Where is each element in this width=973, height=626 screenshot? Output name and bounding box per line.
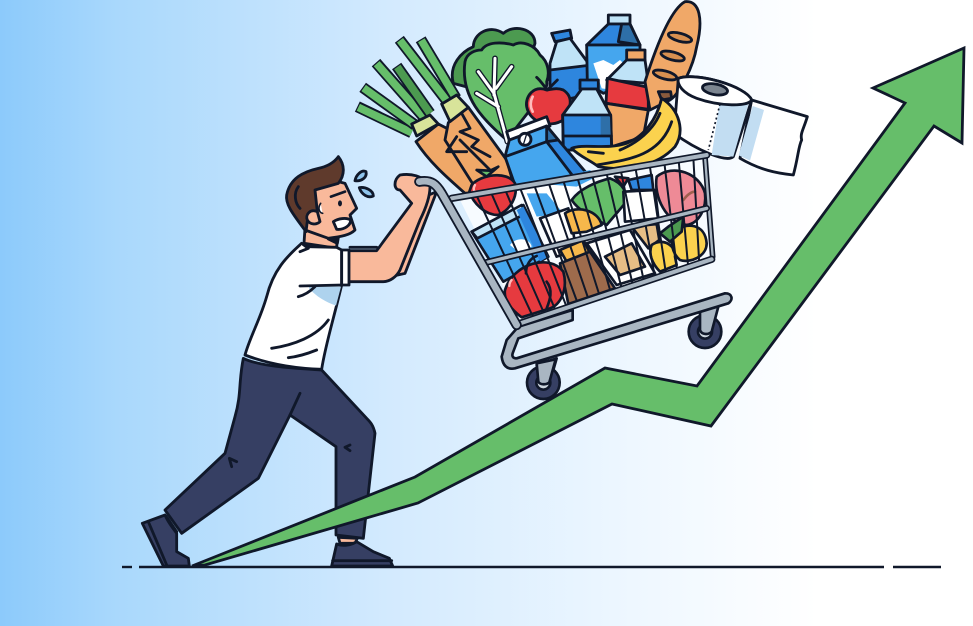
right carrot bbox=[445, 107, 513, 190]
man: torso, head and arms bbox=[245, 157, 437, 369]
rear forearm bbox=[387, 192, 437, 276]
top rail bbox=[452, 155, 707, 198]
back milk carton bbox=[608, 15, 630, 24]
front arm and hand bbox=[348, 174, 430, 282]
bananas bbox=[572, 92, 680, 168]
face bbox=[305, 182, 357, 238]
chin shadow bbox=[328, 238, 338, 243]
ear bbox=[307, 211, 320, 224]
basket frame bbox=[419, 155, 713, 325]
right side bbox=[705, 157, 713, 257]
hair detail bbox=[295, 187, 300, 208]
small apple bbox=[469, 175, 516, 215]
white carton middle bbox=[518, 181, 578, 218]
big red apple bbox=[505, 262, 565, 317]
sleeve cuff bbox=[342, 250, 349, 285]
eye and brow bbox=[319, 192, 345, 213]
ground line bbox=[122, 566, 941, 568]
groceries above the cart bbox=[357, 2, 807, 193]
right shoe bbox=[332, 542, 393, 566]
red-label bottle bbox=[627, 50, 645, 60]
tan block right bbox=[632, 224, 659, 248]
rising green arrow bbox=[192, 48, 964, 566]
baguette bbox=[645, 2, 700, 110]
neck bbox=[304, 228, 337, 248]
front milk carton bbox=[505, 117, 587, 190]
pink ham bbox=[656, 171, 705, 225]
white package right bbox=[623, 190, 658, 222]
trouser creases bbox=[229, 393, 350, 467]
gritted teeth bbox=[333, 218, 351, 229]
toilet paper roll bbox=[674, 77, 807, 175]
red apple bbox=[526, 77, 570, 124]
front water bottle bbox=[563, 80, 612, 150]
pale interior bbox=[460, 160, 710, 320]
lettuce bbox=[452, 28, 548, 142]
bottom rail bbox=[518, 259, 712, 324]
shirt collar bbox=[300, 243, 308, 252]
cart with contents bbox=[419, 155, 732, 399]
carrot greens bbox=[357, 39, 456, 133]
back water bottle bbox=[552, 30, 572, 42]
handle and left side bbox=[419, 181, 517, 325]
right sock bbox=[338, 537, 357, 543]
wheels bbox=[527, 307, 721, 399]
green vegetable bbox=[572, 178, 626, 225]
basket wires bbox=[476, 158, 699, 320]
cart chassis bbox=[502, 293, 732, 369]
left carrot bbox=[416, 124, 497, 193]
shirt bbox=[245, 243, 342, 369]
bits below bananas bbox=[615, 177, 628, 187]
brown bag bbox=[560, 252, 615, 304]
yellow peppers bbox=[650, 242, 677, 272]
white package with tan square bbox=[587, 230, 655, 285]
shirt folds bbox=[272, 247, 377, 358]
cart contents bbox=[460, 160, 710, 320]
juice carton with orange bbox=[540, 208, 577, 257]
red-label bottle, milk carton and water bottle behind bbox=[550, 15, 648, 147]
shirt shadow bbox=[309, 287, 341, 306]
man: legs and shoes bbox=[142, 358, 393, 566]
blue box lower left bbox=[472, 205, 548, 282]
trousers bbox=[165, 358, 375, 538]
left shoe bbox=[142, 515, 189, 566]
left sock bbox=[165, 516, 177, 533]
hair bbox=[286, 157, 343, 232]
sweat drops bbox=[355, 171, 373, 197]
carrot markings bbox=[447, 113, 490, 170]
middle rail bbox=[487, 208, 707, 262]
